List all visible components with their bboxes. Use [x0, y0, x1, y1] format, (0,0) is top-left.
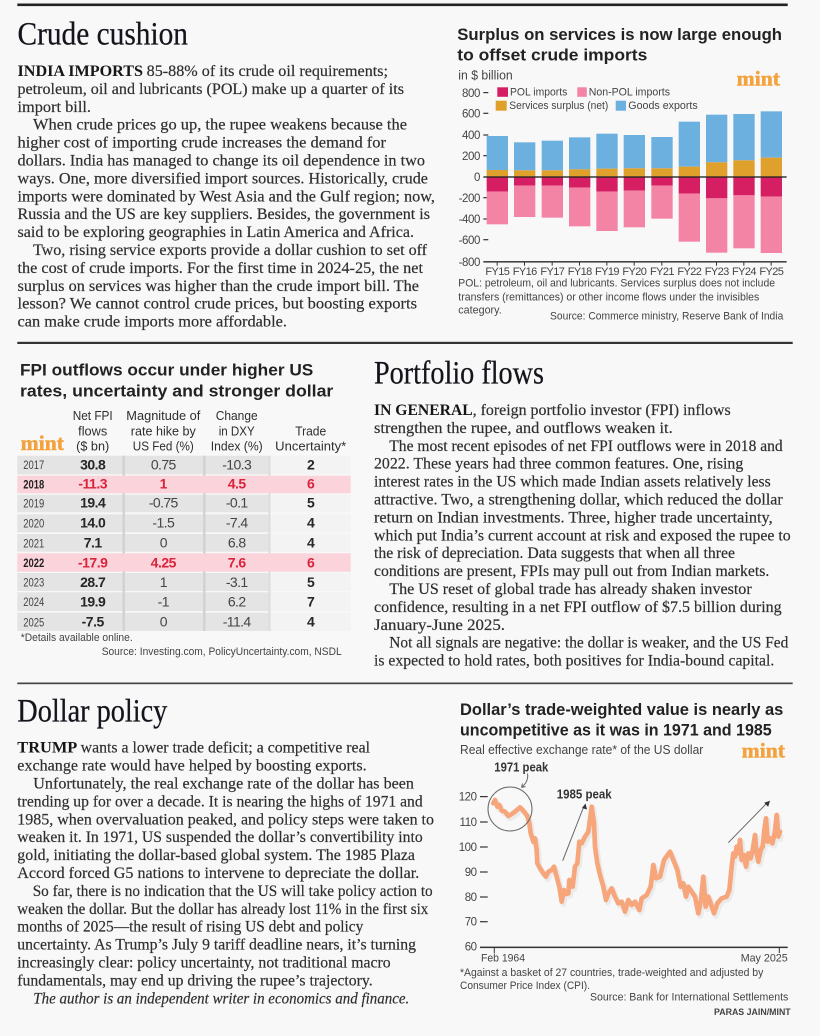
row: 2025: 4 [307, 614, 315, 630]
panel: FPI outflows table [17, 361, 351, 658]
text block: crude cushion body: When crude prices go up, the rupee weakens because the [33, 117, 407, 134]
bars: services surplus [487, 158, 782, 177]
row: 2021: 7.1 [84, 535, 102, 551]
text block: crude cushion body: import bill. [18, 99, 91, 116]
x axis labels [485, 266, 784, 278]
unit label: in $ billion [458, 68, 513, 82]
text block: portfolio flows body: which put India’s current account at risk and exposed the rupee to [374, 527, 791, 544]
callout: 1971 peak label: 1971 peak [494, 761, 548, 775]
legend [496, 86, 698, 112]
y axis: -400 [459, 214, 480, 226]
row: 2024: 6.2 [228, 593, 246, 609]
text block: crude cushion body: said to be exploring geographies in Latin America and Africa. [18, 224, 414, 241]
row: 2022: 2022 [23, 556, 45, 570]
row: 2017: 0.75 [151, 456, 177, 472]
row: 2019: -0.75 [149, 495, 179, 511]
x axis labels: FY15 [485, 266, 510, 278]
table header: rate hike by [131, 425, 197, 439]
row: 2022: 7.6 [228, 554, 246, 570]
row: 2024: 19.9 [80, 593, 106, 609]
text block: dollar policy body: wants a lower trade deficit; a competitive real [81, 740, 370, 757]
text block: portfolio flows body: interest rates in the US which made Indian assets relatively less [374, 474, 771, 491]
arrow: 1985 rise [563, 804, 587, 861]
text block: dollar policy body: gold, initiating the dollar-based global system. The 1985 Plaza [17, 847, 415, 864]
text block: dollar policy body: TRUMP [17, 740, 78, 757]
row: 2023: 2023 [23, 576, 45, 590]
text block: crude cushion body: Two, rising service exports provide a dollar cushion to set off [33, 242, 428, 259]
row: 2017 [23, 456, 315, 472]
y axis: 70 [465, 917, 477, 929]
heading: dollar chart title [460, 700, 783, 739]
text block: crude cushion body: ways. One, more diversified import sources. Historically, crude [18, 170, 428, 187]
callout: 1985 peak label: 1985 peak [557, 787, 612, 801]
heading: surplus chart title: to offset crude imports [457, 46, 647, 65]
text block: crude cushion body: INDIA IMPORTS [18, 63, 143, 80]
row: 2019: -0.1 [226, 495, 248, 511]
y axis: 80 [465, 892, 477, 904]
bars: non-POL imports [487, 186, 782, 253]
text block: crude cushion body: lesson? We cannot control crude prices, but boosting exports [18, 296, 417, 313]
row: 2024: -1 [158, 593, 170, 609]
table header: Change [216, 409, 258, 423]
row: 2020: 14.0 [80, 515, 106, 531]
credit: PARAS JAIN/MINT [714, 1007, 791, 1018]
text block: dollar policy body: So far, there is no indication that the US will take policy action to [33, 883, 433, 900]
chart note: POL: petroleum, oil and lubricants. Services surplus does not include [458, 278, 775, 290]
table header: Net FPI [73, 409, 113, 423]
text block: portfolio flows body: the risk of depreciation. Data suggests that when all three [374, 545, 735, 562]
text block: portfolio flows body: The US reset of global trade has already shaken investor [389, 581, 753, 598]
row: 2019 [23, 495, 315, 511]
heading: surplus chart title [457, 25, 782, 65]
panel: services surplus chart [457, 25, 787, 322]
text block: dollar policy body: weaken it. In 1971, US suspended the dollar’s convertibility into [17, 829, 423, 846]
text block: portfolio flows body: attractive. Two, a strengthening dollar, which reduced the dollar [374, 492, 784, 508]
chart note: *Against a basket of 27 countries, trade-weighted and adjusted by [460, 967, 764, 979]
heading: FPI table title [20, 361, 334, 401]
row: 2020: 2020 [23, 516, 45, 530]
table source: Source: Investing.com, PolicyUncertainty.com, NSDL [102, 646, 342, 658]
heading: Portfolio flows: Portfolio flows [374, 355, 544, 391]
row: 2024: 7 [307, 593, 315, 609]
arrow: 1971 peak pointer [522, 774, 528, 788]
row: 2025: 2025 [23, 615, 45, 629]
x axis labels: FY22 [677, 266, 702, 278]
x axis labels: FY21 [650, 266, 674, 278]
text block: crude cushion body: 85-88% of its crude oil requirements; [147, 63, 388, 80]
text block: crude cushion body: surplus on services was higher than the crude import bill. The [18, 278, 419, 295]
y axis: 600 [462, 108, 480, 120]
text block: portfolio flows body: IN GENERAL [374, 402, 473, 419]
row: 2018: 6 [307, 476, 315, 492]
row: 2023 [23, 574, 315, 590]
bars: POL imports [487, 177, 782, 198]
text block: portfolio flows body: Not all signals are negative: the dollar is weaker, and the US Fed [389, 635, 789, 652]
y axis: 200 [462, 151, 480, 163]
text block: dollar policy body: fundamentals, may end up driving the rupee’s trajectory. [17, 972, 373, 989]
chart note [460, 967, 764, 992]
x axis: Feb 1964 [481, 953, 525, 965]
table header: flows [78, 425, 107, 439]
table header: US Fed (%) [133, 440, 194, 454]
row: 2020 [23, 515, 315, 531]
heading: FPI table title: FPI outflows occur under higher US [20, 361, 313, 380]
row: 2021: 6.8 [228, 535, 246, 551]
row: 2020: 4 [307, 515, 315, 531]
x axis labels: FY18 [568, 266, 592, 278]
row: 2017: 30.8 [80, 456, 106, 472]
y axis: 800 [462, 88, 480, 100]
text block: dollar policy body: exchange rate would have helped by boosting exports. [17, 758, 367, 775]
row: 2021 [23, 535, 315, 551]
source: commerce ministry: Source: Commerce ministry, Reserve Bank of India [550, 310, 784, 322]
row: 2022: 4.25 [151, 554, 177, 570]
y axis [459, 792, 488, 954]
x axis labels: FY24 [732, 266, 756, 278]
text block: dollar policy body: increasingly clear: policy uncertainty, not traditional macro [17, 954, 391, 972]
row: 2023: 5 [307, 574, 315, 590]
row: 2024 [23, 593, 315, 609]
bars: goods exports [487, 111, 782, 170]
x axis labels: FY17 [540, 266, 565, 278]
row: 2020: -1.5 [152, 515, 175, 531]
heading: dollar chart title: Dollar’s trade-weighted value is nearly as [460, 700, 783, 719]
y axis: 110 [460, 817, 477, 829]
heading: FPI table title: rates, uncertainty and stronger dollar [20, 382, 334, 401]
row: 2021: 2021 [23, 536, 45, 550]
y axis [459, 88, 488, 269]
logo: mint: mint [21, 431, 64, 455]
table footnote: *Details available online. [21, 632, 133, 644]
legend: Services surplus (net) [509, 100, 608, 112]
row: 2018: 1 [160, 476, 168, 492]
row: 2023: 1 [160, 574, 168, 590]
row: 2025: 0 [160, 614, 168, 630]
heading: dollar chart title: uncompetitive as it was in 1971 and 1985 [460, 720, 772, 739]
text block: portfolio flows body: January-June 2025. [374, 617, 505, 634]
table header: ($ bn) [76, 440, 109, 454]
chart note: category. [458, 304, 502, 316]
text block: dollar policy body: 1985, when overvaluation peaked, and policy steps were taken to [17, 811, 434, 828]
legend: Goods exports [628, 100, 698, 112]
source: BIS: Source: Bank for International Settlements [590, 992, 789, 1004]
chart note [458, 278, 775, 316]
row: 2022 [23, 554, 315, 570]
text block: portfolio flows body: conditions are present, FPIs may pull out from Indian markets. [374, 563, 769, 580]
row: 2018: 2018 [23, 477, 45, 491]
table header: in DXY [219, 425, 255, 439]
text block: portfolio flows body: strengthen the rupee, and outflows weaken it. [374, 420, 673, 437]
text block: crude cushion body: petroleum, oil and lubricants (POL) make up a quarter of its [18, 81, 404, 98]
y axis: -800 [459, 257, 480, 269]
text block: crude cushion body: imports were dominated by West Asia and the Gulf region; now, [18, 188, 435, 205]
row: 2018: -11.3 [78, 476, 108, 492]
x axis labels: FY20 [622, 266, 647, 278]
row: 2018: 4.5 [228, 476, 246, 492]
y axis: -200 [459, 193, 480, 205]
text block: portfolio flows body [374, 402, 791, 670]
x axis: May 2025 [741, 953, 788, 965]
row: 2019: 5 [307, 495, 315, 511]
row: 2021: 4 [307, 535, 315, 551]
line chart: real effective exchange rate [493, 800, 782, 916]
row: 2019: 2019 [23, 496, 45, 510]
row: 2022: 6 [307, 554, 315, 570]
row: 2018 [23, 476, 315, 492]
text block: portfolio flows body: , foreign portfolio investor (FPI) inflows [473, 402, 731, 419]
logo: mint: mint [737, 66, 780, 90]
row: 2019: 19.4 [80, 495, 106, 511]
text block: crude cushion body: Russia and the US are key suppliers. Besides, the government is [18, 206, 430, 223]
chart note: Consumer Price Index (CPI). [460, 980, 590, 992]
row: 2020: -7.4 [226, 515, 248, 531]
x axis [480, 947, 788, 965]
text block: crude cushion body: can make crude imports more affordable. [18, 314, 287, 331]
text block: dollar policy body: weaken the dollar. But the dollar has already lost 11% in the first six [17, 901, 429, 918]
y axis: 120 [459, 792, 477, 804]
table header [73, 409, 346, 454]
panel: dollar value chart [459, 700, 791, 1018]
heading: surplus chart title: Surplus on services is now large enough [457, 25, 782, 44]
row: 2022: -17.9 [78, 554, 108, 570]
text block: dollar policy body: months of 2025—the result of rising US debt and policy [17, 919, 364, 936]
heading: Dollar policy: Dollar policy [17, 694, 168, 730]
panel: crude cushion article [18, 16, 435, 331]
text block: portfolio flows body: The most recent episodes of net FPI outflows were in 2018 and [389, 438, 783, 455]
stacked bar chart [483, 111, 787, 266]
text block: dollar policy body: trending up for over a decade. It is nearing the highs of 1971 and [17, 793, 423, 810]
text block: crude cushion body: higher cost of importing crude increases the demand for [18, 135, 387, 152]
text block: crude cushion body: dollars. India has managed to change its oil dependence in two [18, 152, 425, 170]
arrow: recent rise [728, 801, 770, 843]
text block: portfolio flows body: return on Indian investments. Three, higher trade uncertainty, [374, 509, 773, 526]
text block: crude cushion body [18, 63, 435, 331]
row: 2021: 0 [160, 535, 168, 551]
y axis: -600 [459, 235, 480, 247]
row: 2017: -10.3 [222, 456, 252, 472]
callout: 1971 peak circle [488, 787, 532, 831]
heading: Crude cushion: Crude cushion [18, 16, 188, 52]
table header: Magnitude of [126, 409, 201, 423]
text block: portfolio flows body: 2022. These years had three common features. One, rising [374, 456, 744, 473]
chart note: transfers (remittances) or other income flows under the invisibles [458, 292, 760, 304]
y axis: 400 [462, 130, 480, 142]
y axis: 0 [474, 172, 480, 184]
row: 2017: 2 [307, 456, 315, 472]
x axis labels: FY19 [595, 266, 619, 278]
table header: Index (%) [211, 440, 263, 454]
row: 2017: 2017 [23, 458, 45, 472]
text block: dollar policy body: uncertainty. As Trump’s July 9 tariff deadline nears, it’s turning [17, 937, 416, 954]
text block: portfolio flows body: confidence, resulting in a net FPI outflow of $7.5 billion during [374, 599, 782, 616]
row: 2025: -7.5 [82, 614, 104, 630]
legend: POL imports [510, 86, 568, 98]
text block: dollar policy body: The author is an independent writer in economics and finance. [33, 990, 409, 1007]
text block: dollar policy body [17, 740, 434, 1007]
text block: crude cushion body: the cost of crude imports. For the first time in 2024-25, the net [18, 260, 424, 277]
y axis: 60 [465, 942, 477, 954]
row: 2025: -11.4 [223, 614, 251, 630]
x axis labels: FY25 [759, 266, 784, 278]
row: 2023: 28.7 [80, 574, 106, 590]
text block: dollar policy body: Unfortunately, the real exchange rate of the dollar has been [33, 776, 414, 792]
text block: dollar policy body: Accord forced G5 nations to intervene to depreciate the dollar. [17, 865, 419, 882]
table header: Trade [295, 425, 326, 439]
logo: mint: mint [742, 738, 785, 762]
table header: Uncertainty* [275, 440, 346, 454]
chart subtitle: Real effective exchange rate* of the US dollar [460, 743, 703, 757]
row: 2023: -3.1 [226, 574, 248, 590]
panel: dollar policy article [17, 694, 434, 1007]
row: 2024: 2024 [23, 595, 45, 609]
table rows background [17, 456, 351, 631]
legend: Non-POL imports [589, 86, 670, 98]
row: 2025 [23, 614, 315, 630]
x axis labels: FY23 [705, 266, 729, 278]
panel: portfolio flows article [374, 355, 791, 670]
text block: portfolio flows body: is expected to hold rates, both positives for India-bound capital. [374, 653, 774, 670]
x axis labels: FY16 [513, 266, 537, 278]
y axis: 100 [459, 842, 477, 854]
y axis: 90 [465, 867, 477, 879]
